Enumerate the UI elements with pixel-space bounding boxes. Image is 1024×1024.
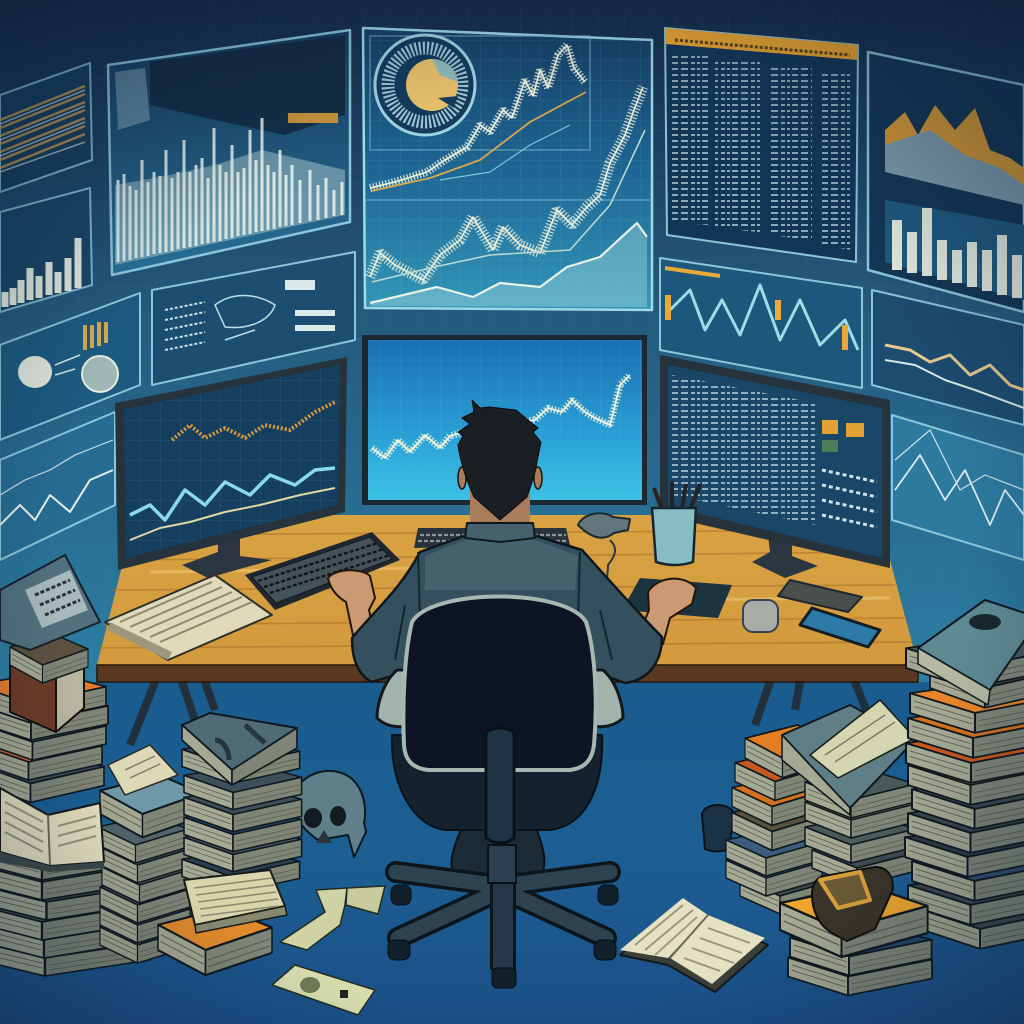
neck (470, 478, 530, 528)
book pile: lower left (0, 832, 150, 976)
desk (97, 515, 918, 745)
panel: world map and spikes chart (108, 30, 350, 275)
book pile: front left (158, 870, 287, 975)
book pile: middle left (182, 713, 302, 894)
skull (293, 771, 366, 857)
right hand and forearm (641, 579, 696, 644)
desk mouse (743, 600, 778, 632)
floor (0, 682, 1024, 1024)
cup on floor (702, 805, 734, 852)
loose papers on middle stack (108, 745, 178, 795)
ears (458, 467, 542, 489)
book on front left pile (184, 870, 287, 933)
wheels (388, 885, 618, 988)
hair (458, 400, 541, 520)
book pile: front right with item on top (780, 867, 932, 995)
collar (465, 523, 535, 542)
panel: far left bar chart (0, 188, 92, 312)
money bills (272, 886, 385, 1015)
gauge dial (375, 35, 475, 135)
panel: lower middle left map (152, 252, 355, 385)
chair cushion (451, 830, 544, 878)
background wall (0, 0, 1024, 690)
brown tall book (10, 655, 84, 732)
open book on floor (620, 898, 768, 992)
open book on left pile (0, 788, 104, 872)
panel: right area and bar charts (868, 52, 1024, 312)
shirt (352, 535, 662, 683)
keyboard behind trader (414, 528, 570, 548)
trader (328, 400, 696, 683)
right monitor (660, 355, 890, 578)
left monitor (115, 357, 347, 578)
panel: right lower zigzag chart (892, 415, 1024, 560)
pen cup (652, 482, 700, 565)
panel: right mid line chart (872, 290, 1024, 425)
top book of middle left pile (182, 713, 297, 785)
mouse and cable (578, 513, 630, 585)
back rest (403, 596, 596, 770)
telephone on left pile (0, 555, 100, 650)
panel: left lower line chart (0, 412, 115, 560)
seat (392, 735, 602, 830)
panel: far left upper lines chart (0, 63, 92, 192)
book pile: middle stack (98, 775, 202, 963)
gold framed object (812, 867, 893, 941)
panel: data table with orange header (665, 28, 858, 262)
open papers on desk (105, 575, 272, 660)
book pile: right middle (726, 700, 920, 914)
mouse pad (622, 578, 732, 618)
center monitor (362, 335, 647, 505)
armrests (377, 670, 623, 727)
back support post (486, 728, 514, 843)
phones (778, 580, 880, 647)
book pile: far left (0, 635, 108, 802)
book pile: far right (905, 600, 1024, 949)
left hand and forearm (328, 570, 375, 640)
shirt highlight (425, 538, 578, 590)
keyboard (245, 532, 400, 610)
office chair (377, 596, 623, 988)
grey book with paper on top (782, 700, 915, 815)
top teal book (918, 600, 1024, 705)
panel: center rising price chart with gauge (363, 28, 652, 310)
panel: left pie charts (0, 293, 140, 440)
panel: mid right wave chart (660, 258, 862, 388)
shirt creases (395, 552, 612, 660)
base legs (396, 872, 610, 970)
